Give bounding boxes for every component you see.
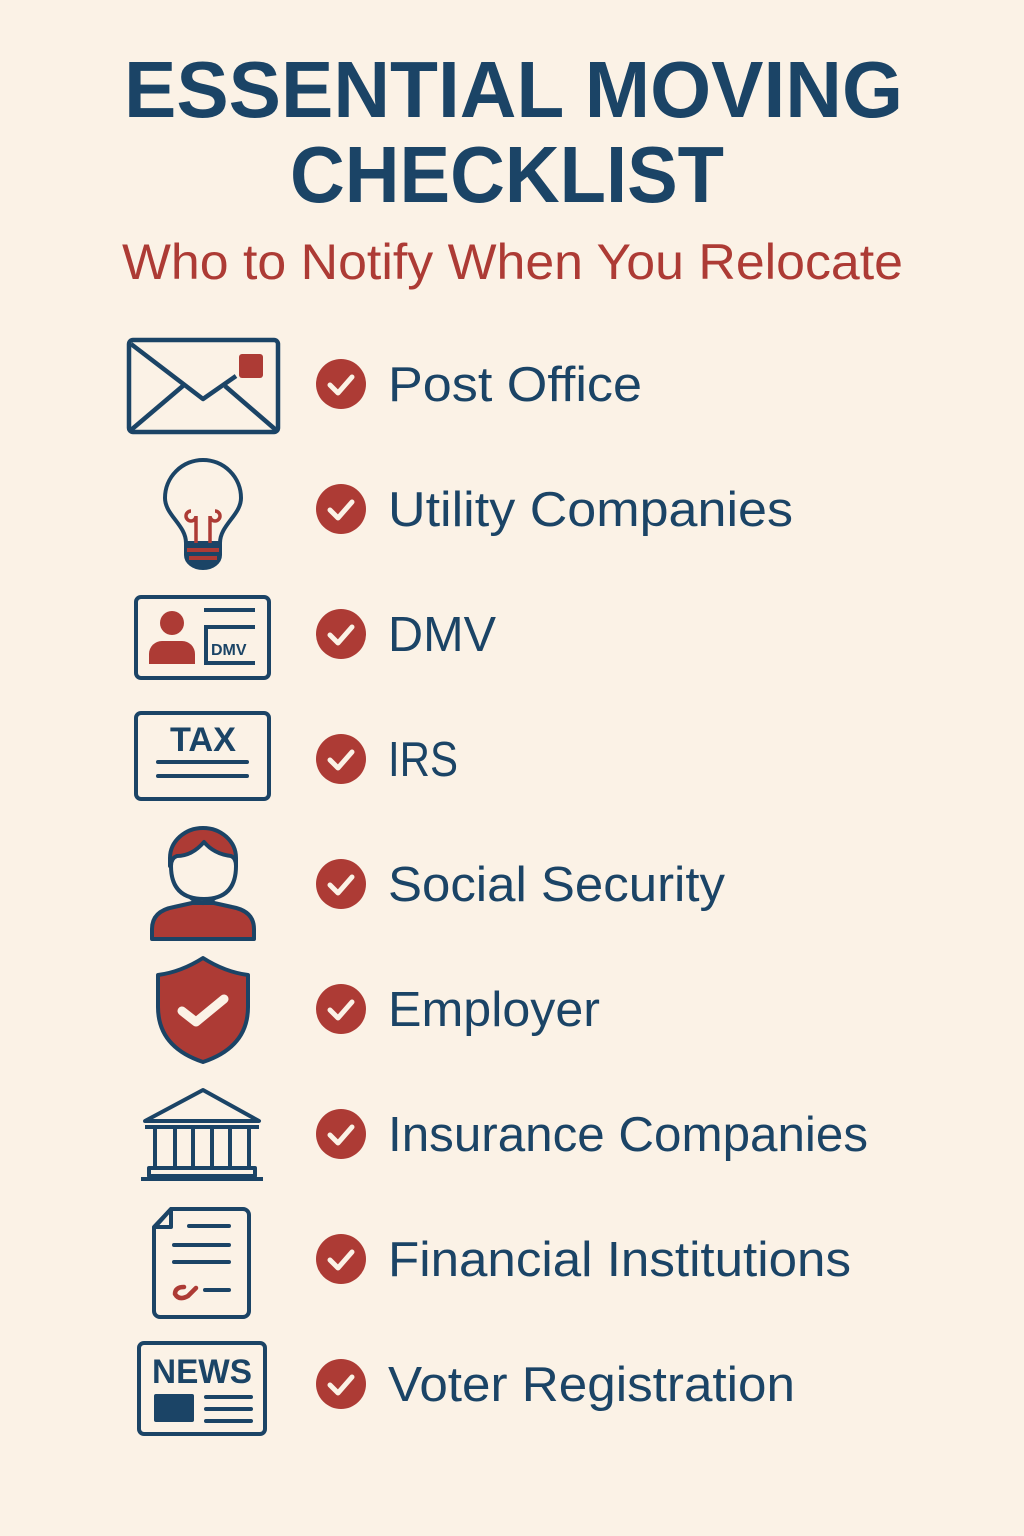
- icon: envelope: [129, 340, 278, 432]
- icon: tax form: [136, 713, 269, 799]
- icon: shield: [158, 958, 248, 1062]
- title: ESSENTIAL MOVING: [124, 45, 903, 134]
- item: DMV: [316, 608, 496, 662]
- icon: light bulb: [165, 460, 241, 569]
- item: Utility Companies: Utility Companies: [388, 483, 793, 537]
- item: Social Security: Social Security: [388, 858, 726, 912]
- item: Post Office: Post Office: [388, 358, 642, 412]
- icon: document: [154, 1209, 249, 1317]
- item: IRS: [316, 733, 458, 787]
- item: DMV: DMV: [388, 608, 496, 662]
- icon: tax form: TAX: [170, 721, 236, 759]
- item: Insurance Companies: Insurance Companies: [388, 1108, 868, 1162]
- item: Financial Institutions: Financial Institutions: [388, 1233, 851, 1287]
- subtitle: Who to Notify When You Relocate: [122, 234, 903, 290]
- icon: DMV card: [136, 597, 269, 678]
- icon: person: [152, 828, 254, 939]
- icon: newspaper: NEWS: [152, 1353, 252, 1391]
- item: Voter Registration: Voter Registration: [388, 1358, 795, 1412]
- icon: DMV card: DMV: [211, 642, 247, 659]
- icon: newspaper: [139, 1343, 265, 1434]
- item: Employer: Employer: [388, 983, 600, 1037]
- item: IRS: IRS: [388, 733, 458, 787]
- checklist items: [316, 358, 868, 1412]
- title: CHECKLIST: [290, 130, 724, 219]
- title: [124, 45, 903, 219]
- icon: bank building: [141, 1090, 263, 1179]
